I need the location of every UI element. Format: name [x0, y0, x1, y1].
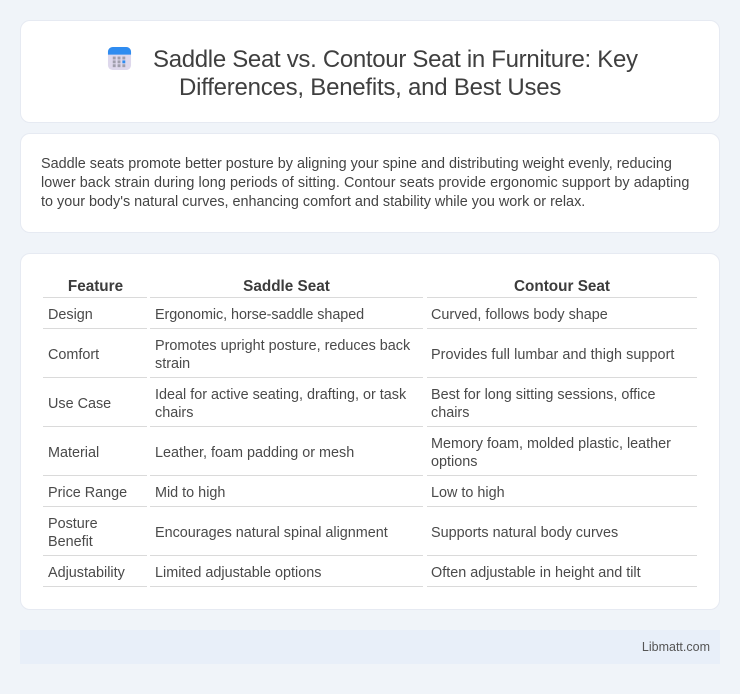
intro panel	[20, 133, 720, 233]
row: comfort	[48, 338, 674, 372]
text: Supports natural body curves	[431, 525, 618, 541]
text: Best for long sitting sessions, office	[431, 387, 656, 403]
header panel	[20, 20, 720, 123]
row: use case	[48, 387, 656, 421]
text: Mid to high	[155, 485, 225, 501]
comparison table	[68, 278, 610, 295]
text: chairs	[155, 405, 193, 421]
table header: Contour Seat	[514, 278, 610, 295]
text: Adjustability	[48, 565, 125, 581]
row: price range	[48, 485, 505, 501]
text: Benefit	[48, 534, 93, 550]
table panel	[20, 253, 720, 610]
text: Limited adjustable options	[155, 565, 321, 581]
intro text: to your body's natural curves, enhancing comfort and stability while you work or relax.	[41, 194, 585, 210]
intro text: Saddle seats promote better posture by aligning your spine and distributing weight evenly, reducing	[41, 156, 672, 172]
text: strain	[155, 356, 190, 372]
text: Use Case	[48, 396, 111, 412]
row: posture benefit	[48, 516, 618, 550]
text: Promotes upright posture, reduces back	[155, 338, 410, 354]
intro text	[41, 156, 689, 210]
text: Price Range	[48, 485, 127, 501]
text: Memory foam, molded plastic, leather	[431, 436, 671, 452]
footer credit: Libmatt.com	[642, 640, 710, 654]
row: design	[48, 307, 608, 323]
text: Curved, follows body shape	[431, 307, 608, 323]
row: material	[48, 436, 671, 470]
row: adjustability	[48, 565, 641, 581]
title: Differences, Benefits, and Best Uses	[179, 74, 561, 101]
title	[153, 46, 638, 101]
table header: Feature	[68, 278, 123, 295]
text: Leather, foam padding or mesh	[155, 445, 354, 461]
text: Ergonomic, horse-saddle shaped	[155, 307, 364, 323]
footer bar	[20, 630, 720, 664]
text: chairs	[431, 405, 469, 421]
table header	[68, 278, 610, 295]
intro text: lower back strain during long periods of sitting. Contour seats provide ergonomic support by adapting	[41, 175, 689, 191]
text: Posture	[48, 516, 98, 532]
text: Comfort	[48, 347, 99, 363]
text: Often adjustable in height and tilt	[431, 565, 641, 581]
text: Ideal for active seating, drafting, or task	[155, 387, 406, 403]
text: options	[431, 454, 477, 470]
text: Design	[48, 307, 93, 323]
title: Saddle Seat vs. Contour Seat in Furniture: Key	[153, 46, 638, 73]
text: Encourages natural spinal alignment	[155, 525, 388, 541]
text: Low to high	[431, 485, 505, 501]
text: Material	[48, 445, 99, 461]
icon: calendar	[108, 47, 132, 70]
text: Provides full lumbar and thigh support	[431, 347, 674, 363]
table header: Saddle Seat	[243, 278, 330, 295]
